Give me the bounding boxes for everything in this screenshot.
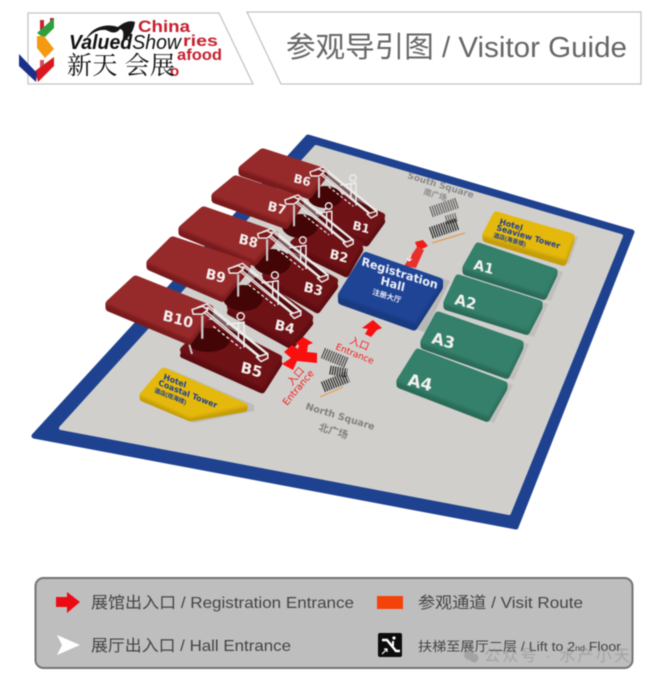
panel: logo header	[19, 13, 253, 84]
tier: B1 and B6 with escalator	[239, 149, 385, 246]
tier: B3 and B8 with escalator: B3	[302, 280, 324, 300]
block: hotel coastal tower	[140, 368, 254, 423]
label: Seaview Tower	[495, 223, 561, 251]
block: registration hall: Hall	[379, 273, 406, 295]
watermark: 公众号 · 水产小天	[484, 647, 630, 665]
tier: B5 and B10 with escalator: B5	[239, 358, 264, 382]
tier: B1 and B6 with escalator: B6	[292, 171, 312, 189]
tier: B3 and B8 with escalator	[179, 207, 338, 313]
text: Expo fragment: o	[170, 63, 179, 80]
title: 参观导引图 / Visitor Guide	[286, 31, 627, 64]
tier: B2 and B7 with escalator: B2	[328, 247, 349, 267]
text: ValuedShow: ValuedShow	[69, 32, 183, 54]
icon: south stairs	[431, 203, 465, 243]
block: A2: A2	[453, 290, 478, 314]
panel: title banner	[247, 12, 641, 84]
icon: escalator	[378, 633, 402, 657]
panel: site map	[34, 137, 632, 527]
route: red corridor to south square	[404, 240, 428, 268]
text: south square: 南广场	[422, 186, 448, 203]
tier: B1 and B6 with escalator: B1	[351, 218, 371, 236]
text: Seafood fragment: afood	[177, 47, 222, 64]
tier: B5 and B10 with escalator: B10	[161, 308, 194, 332]
arrow: cross entrance arrows	[282, 337, 317, 370]
text: north square: North Square	[304, 401, 376, 433]
text: entrance label east: 入口	[348, 336, 371, 353]
tier: B4 and B9 with escalator: B9	[204, 266, 227, 287]
tier: B4 and B9 with escalator	[147, 237, 313, 349]
text: entrance label west: 入口	[286, 366, 307, 388]
icon: white hall arrow	[57, 635, 80, 655]
label: Hotel	[163, 372, 187, 390]
map base	[34, 137, 632, 527]
block: A3: A3	[430, 328, 457, 353]
text: Fisheries fragment: ries	[183, 33, 218, 50]
text: China: China	[138, 18, 191, 36]
panel: legend	[36, 578, 632, 668]
block: A1	[463, 243, 563, 301]
text: south square: South Square	[406, 171, 475, 201]
text: registration entrance: 展馆出入口 / Registration Entrance	[91, 594, 354, 612]
text: 新天会展: 新天 会展	[67, 46, 175, 82]
tier: B4 and B9 with escalator: B4	[273, 317, 296, 338]
tier: B5 and B10 with escalator	[106, 276, 282, 393]
block: registration hall: 注册大厅	[372, 286, 403, 305]
text: lift to 2nd floor: 扶梯至展厅二层 / Lift to 2 nd Floor	[418, 639, 622, 654]
tier: B2 and B7 with escalator: B7	[266, 199, 287, 219]
text: visit route: 参观通道 / Visit Route	[418, 594, 583, 612]
tier: B2 and B7 with escalator	[212, 176, 363, 277]
label: Registration	[360, 254, 439, 292]
block: registration hall	[339, 253, 450, 332]
block: A4	[397, 349, 513, 423]
block: A1: A1	[472, 257, 495, 278]
icon: visit route swatch	[377, 596, 403, 609]
tier: B3 and B8 with escalator: B8	[237, 232, 259, 252]
icon: north stairs	[320, 353, 348, 397]
label: Hotel	[498, 217, 524, 233]
text: entrance label east: Entrance	[334, 343, 375, 367]
label: 酒店(海景楼)	[492, 231, 527, 248]
block: A4: A4	[406, 369, 434, 395]
block: hotel seaview tower	[483, 212, 578, 266]
icon: logo swoosh	[86, 21, 135, 43]
label: 酒店(观海楼)	[154, 386, 187, 407]
text: hall entrance: 展厅出入口 / Hall Entrance	[91, 637, 291, 655]
icon: tangram logo mark	[19, 18, 54, 82]
block: A2	[444, 275, 548, 337]
text: north square: 北广场	[317, 420, 350, 442]
text: entrance label west: Entrance	[281, 368, 317, 408]
block: A3	[421, 312, 529, 380]
icon: red entrance arrow	[56, 592, 80, 613]
arrow: entrance to registration hall	[362, 320, 382, 337]
label: Coastal Tower	[158, 378, 218, 410]
